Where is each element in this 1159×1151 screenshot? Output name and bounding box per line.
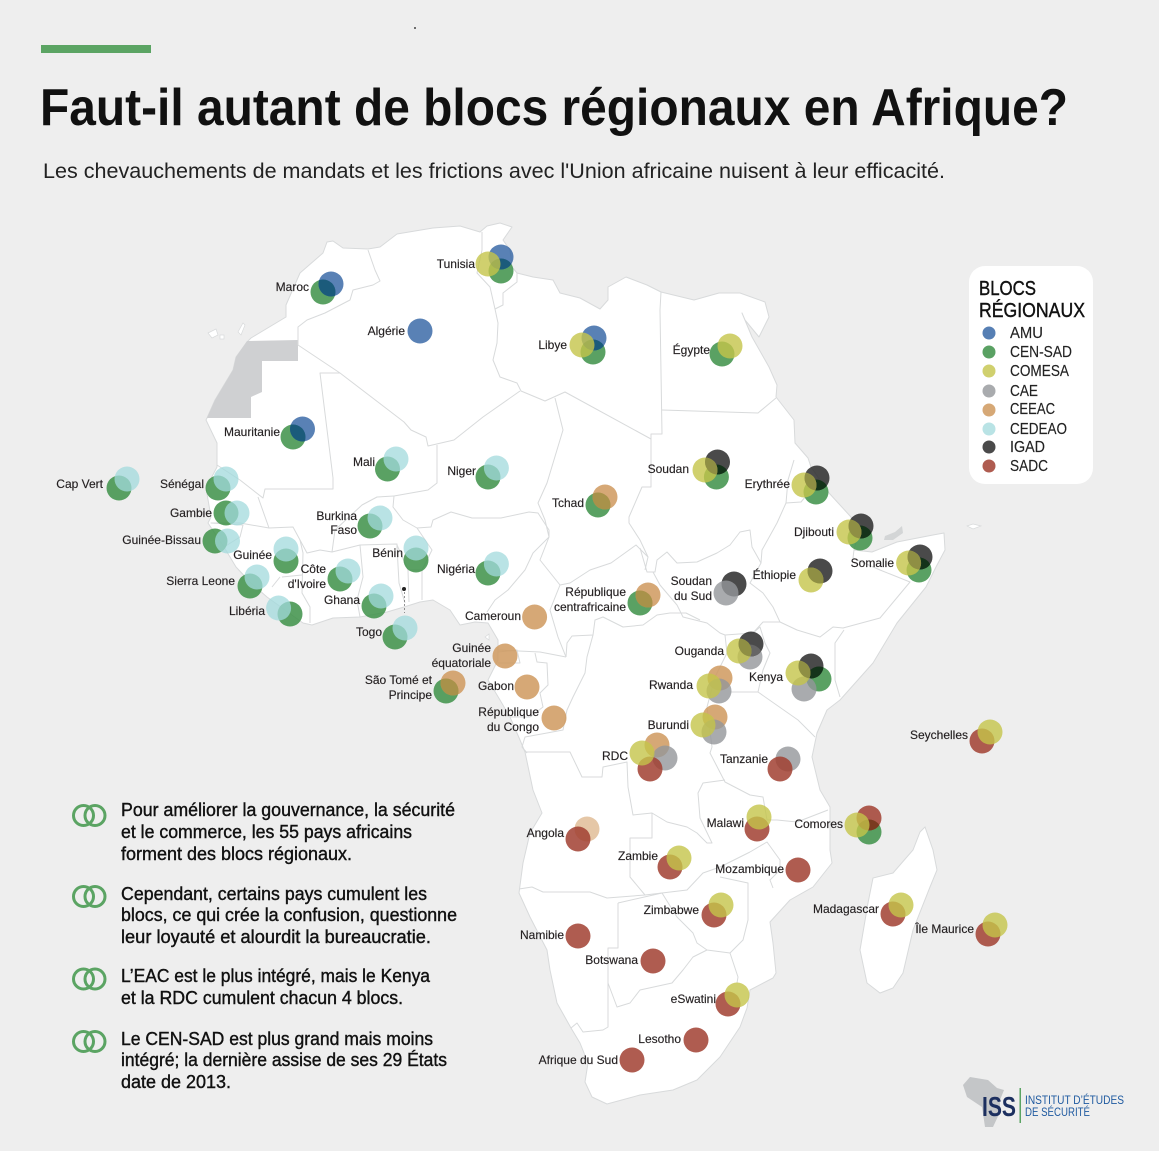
Togo: Togo bbox=[356, 625, 382, 639]
Égypte bbox=[673, 334, 742, 366]
Ghana: Ghana bbox=[324, 593, 360, 607]
bullet: CEN-SAD: date de 2013. bbox=[121, 1072, 231, 1092]
Djibouti bbox=[794, 514, 874, 550]
Algérie: Algérie bbox=[368, 324, 405, 338]
Mali: Mali bbox=[353, 455, 375, 469]
bullet: CEN-SAD: intégré; la dernière assise de ses 29 États bbox=[121, 1050, 447, 1070]
Cap Vert bbox=[56, 466, 140, 500]
legend: SADC bbox=[1010, 458, 1048, 475]
bullet: gouvernance bbox=[74, 800, 455, 864]
Mali bbox=[353, 446, 408, 482]
Mozambique: Mozambique bbox=[715, 862, 784, 876]
Burkina Faso bbox=[316, 506, 392, 538]
bullet: cumul: blocs, ce qui crée la confusion, questionne bbox=[121, 905, 457, 925]
Madagascar bbox=[813, 892, 914, 926]
Madagascar: Madagascar bbox=[813, 902, 879, 916]
Tchad: Tchad bbox=[552, 496, 584, 510]
Soudan: Soudan bbox=[648, 462, 689, 476]
Mozambique bbox=[715, 858, 810, 882]
Erythrée: Erythrée bbox=[745, 477, 790, 491]
map of Africa bbox=[206, 27, 981, 1104]
République centrafricaine bbox=[554, 582, 660, 616]
Afrique du Sud bbox=[539, 1048, 644, 1072]
Soudan bbox=[648, 450, 730, 490]
Angola bbox=[527, 816, 600, 852]
Comores: Comores bbox=[794, 817, 843, 831]
Botswana: Botswana bbox=[585, 953, 638, 967]
Erythrée bbox=[745, 466, 830, 504]
Éthiopie bbox=[753, 558, 832, 592]
legend: COMESA bbox=[1010, 363, 1069, 380]
Malawi: Malawi bbox=[707, 816, 744, 830]
bullet: gouvernance: forment des blocs régionaux. bbox=[121, 844, 352, 864]
Bénin: Bénin bbox=[372, 546, 403, 560]
Sénégal: Sénégal bbox=[160, 477, 204, 491]
Tunisia bbox=[437, 244, 514, 284]
Zambie bbox=[618, 846, 692, 880]
Angola: Angola bbox=[527, 826, 564, 840]
Zambie: Zambie bbox=[618, 849, 658, 863]
Kenya bbox=[749, 654, 832, 702]
Lesotho: Lesotho bbox=[638, 1032, 681, 1046]
Somalie: Somalie bbox=[851, 556, 894, 570]
Cap Vert: Cap Vert bbox=[56, 477, 104, 491]
Ghana bbox=[324, 584, 394, 618]
Comores bbox=[794, 806, 882, 844]
São Tomé et Principe bbox=[365, 670, 466, 704]
Guinée équatoriale: équatoriale bbox=[432, 656, 491, 670]
legend: CEDEAO bbox=[1010, 421, 1067, 438]
Côte d'Ivoire: d'Ivoire bbox=[288, 577, 326, 591]
Seychelles: Seychelles bbox=[910, 728, 968, 742]
Rwanda: Rwanda bbox=[649, 678, 693, 692]
bullet: gouvernance: Pour améliorer la gouvernance, la sécurité bbox=[121, 800, 455, 820]
Bénin bbox=[372, 536, 428, 572]
République du Congo: du Congo bbox=[487, 720, 539, 734]
Tanzanie bbox=[720, 746, 800, 782]
title: Faut-il autant de blocs régionaux en Afrique? bbox=[40, 79, 1068, 137]
Libye: Libye bbox=[538, 338, 567, 352]
logo ISS: INSTITUT D’ÉTUDES bbox=[1025, 1094, 1124, 1107]
logo ISS: ISS bbox=[982, 1091, 1016, 1122]
Guinée équatoriale bbox=[432, 641, 518, 670]
accent bar bbox=[41, 45, 151, 53]
São Tomé et Principe: Principe bbox=[389, 688, 432, 702]
bullet: EAC: et la RDC cumulent chacun 4 blocs. bbox=[121, 988, 403, 1008]
Guinée équatoriale: Guinée bbox=[452, 641, 491, 655]
logo ISS: DE SÉCURITÉ bbox=[1025, 1106, 1090, 1119]
Guinée: Guinée bbox=[233, 548, 272, 562]
Île Maurice bbox=[914, 912, 1008, 946]
Nigéria: Nigéria bbox=[437, 562, 475, 576]
Côte d'Ivoire: Côte bbox=[301, 562, 326, 576]
eSwatini bbox=[671, 982, 750, 1016]
Ouganda: Ouganda bbox=[675, 644, 724, 658]
eSwatini: eSwatini bbox=[671, 992, 716, 1006]
Libéria bbox=[229, 596, 302, 626]
République centrafricaine: centrafricaine bbox=[554, 600, 626, 614]
Guinée-Bissau: Guinée-Bissau bbox=[122, 533, 201, 547]
legend: RÉGIONAUX bbox=[979, 299, 1085, 322]
Nigéria bbox=[437, 552, 509, 586]
Tanzanie: Tanzanie bbox=[720, 752, 768, 766]
Rwanda bbox=[649, 666, 732, 704]
Sierra Leone: Sierra Leone bbox=[166, 574, 235, 588]
Lesotho bbox=[638, 1028, 708, 1052]
Togo bbox=[356, 616, 418, 650]
Malawi bbox=[707, 804, 772, 842]
bullet: EAC: L’EAC est le plus intégré, mais le Kenya bbox=[121, 966, 431, 986]
Tchad bbox=[552, 484, 618, 518]
République du Congo: République bbox=[478, 705, 539, 719]
legend: CAE bbox=[1010, 383, 1038, 400]
Zimbabwe bbox=[644, 892, 734, 928]
Gabon bbox=[478, 674, 540, 700]
Maroc: Maroc bbox=[276, 280, 309, 294]
legend bbox=[969, 266, 1093, 484]
legend: AMU bbox=[1010, 325, 1043, 342]
bullet: CEN-SAD bbox=[74, 1029, 447, 1092]
Burundi bbox=[648, 704, 728, 744]
République centrafricaine: République bbox=[565, 585, 626, 599]
RDC bbox=[602, 732, 678, 782]
Cameroun: Cameroun bbox=[465, 609, 521, 623]
Soudan du Sud: du Sud bbox=[674, 589, 712, 603]
Libye bbox=[538, 326, 606, 364]
Égypte: Égypte bbox=[673, 342, 710, 357]
Seychelles bbox=[910, 720, 1002, 754]
Guinée-Bissau bbox=[122, 528, 240, 554]
Algérie bbox=[368, 318, 432, 344]
Botswana bbox=[585, 948, 666, 974]
Côte d'Ivoire bbox=[288, 558, 360, 592]
Gambie: Gambie bbox=[170, 506, 212, 520]
Burkina Faso: Burkina bbox=[316, 509, 357, 523]
Kenya: Kenya bbox=[749, 670, 783, 684]
Afrique du Sud: Afrique du Sud bbox=[539, 1053, 618, 1067]
São Tomé et Principe: São Tomé et bbox=[365, 673, 433, 687]
Ouganda bbox=[675, 632, 764, 670]
bullet: gouvernance: et le commerce, les 55 pays africains bbox=[121, 822, 412, 842]
Tunisia: Tunisia bbox=[437, 257, 475, 271]
Éthiopie: Éthiopie bbox=[753, 567, 796, 582]
Burkina Faso: Faso bbox=[330, 523, 357, 537]
Gambie bbox=[170, 500, 250, 526]
Somalie bbox=[851, 544, 932, 582]
Mauritanie bbox=[224, 416, 315, 450]
Sénégal bbox=[160, 466, 238, 500]
bullet: CEN-SAD: Le CEN-SAD est plus grand mais moins bbox=[121, 1029, 433, 1049]
bullet: EAC bbox=[74, 966, 431, 1008]
Zimbabwe: Zimbabwe bbox=[644, 903, 699, 917]
RDC: RDC bbox=[602, 749, 628, 763]
Namibie bbox=[520, 924, 590, 948]
Sierra Leone bbox=[166, 564, 270, 598]
Mauritanie: Mauritanie bbox=[224, 425, 280, 439]
legend: IGAD bbox=[1010, 439, 1045, 456]
Soudan du Sud bbox=[671, 572, 746, 606]
legend: CEEAC bbox=[1010, 401, 1055, 418]
Namibie: Namibie bbox=[520, 928, 564, 942]
legend: BLOCS bbox=[979, 278, 1036, 300]
subtitle: Les chevauchements de mandats et les frictions avec l'Union africaine nuisent à leur efficacité. bbox=[43, 160, 945, 183]
Gabon: Gabon bbox=[478, 679, 514, 693]
Cameroun bbox=[465, 604, 547, 630]
logo ISS bbox=[963, 1077, 1124, 1127]
Niger bbox=[447, 456, 509, 490]
bullet: cumul: leur loyauté et alourdit la bureaucratie. bbox=[121, 927, 431, 947]
bullet: cumul bbox=[74, 884, 457, 947]
bullet: cumul: Cependant, certains pays cumulent les bbox=[121, 884, 427, 904]
Djibouti: Djibouti bbox=[794, 525, 834, 539]
Maroc bbox=[276, 272, 344, 304]
Libéria: Libéria bbox=[229, 604, 265, 618]
Soudan du Sud: Soudan bbox=[671, 574, 712, 588]
Guinée bbox=[233, 536, 298, 574]
République du Congo bbox=[478, 705, 566, 734]
legend: CEN-SAD bbox=[1010, 344, 1072, 361]
Île Maurice: Île Maurice bbox=[914, 921, 974, 936]
Burundi: Burundi bbox=[648, 718, 689, 732]
Niger: Niger bbox=[447, 464, 476, 478]
